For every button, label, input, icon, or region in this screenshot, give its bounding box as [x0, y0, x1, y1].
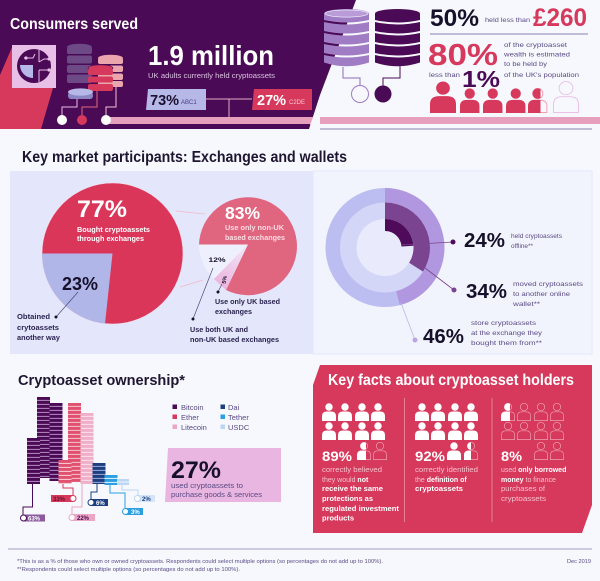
footnotes: **Respondents could select multiple options (so percentages do not add up to 100%).: [17, 567, 241, 573]
column: 8%: used only borrowed: [501, 467, 566, 474]
stat: 80% of wealth: to be held by: [504, 61, 548, 68]
column: 92%: [415, 403, 478, 493]
label: 83%: [225, 203, 285, 242]
stat: 46% at the exchange: 46%: [423, 325, 464, 348]
column: 8%: cryptoassets: [501, 496, 547, 503]
stat: 46% at the exchange: at the exchange they: [471, 330, 543, 337]
stat box: 27% C2DE: [252, 89, 312, 110]
icon: circuit globe: [12, 45, 56, 88]
column: 8%: 8%: [501, 448, 523, 464]
stat: 24% offline: offline**: [511, 243, 533, 250]
stat: 80% of wealth: of the cryptoasset: [504, 42, 567, 49]
column: 89%: [322, 403, 400, 522]
column: 89%: protections as: [322, 496, 373, 503]
stat: 50% held less than 260 pounds: held less than: [485, 18, 530, 24]
stat box: 27% C2DE: C2DE: [289, 100, 305, 106]
column: 92%: the definition of: [415, 477, 467, 484]
legend: coin types: Bitcoin: [181, 403, 204, 412]
stat: 24% offline: 24%: [464, 229, 505, 252]
label: tether 3%: 3%: [131, 510, 140, 516]
column: 92%: cryptoassets: [415, 486, 463, 493]
label: 12%: 12%: [208, 258, 226, 264]
callout: obtained another way: crytoassets: [17, 325, 59, 332]
strip: pink base line: [105, 117, 600, 124]
label: 77%: Bought cryptoassets: [77, 225, 150, 234]
icon: lilac database with node: [324, 9, 369, 102]
stat: 50% held less than 260 pounds: 50%: [430, 5, 479, 32]
column: 92%: correctly identified: [415, 467, 478, 474]
label: dai 6%: 6%: [96, 501, 105, 507]
label: 77%: [77, 196, 150, 243]
label: usdc 2%: 2%: [142, 497, 151, 503]
white triangle accent: [310, 100, 320, 125]
column: 8%: purchases of: [501, 486, 545, 493]
callout: use only UK: exchanges: [215, 309, 252, 316]
stat: 50% held less than 260 pounds: £260: [533, 4, 587, 32]
stat: 80% of wealth: 1%: [462, 66, 500, 92]
stat: 46% at the exchange: [401, 303, 543, 348]
label: ether 33%: 33%: [53, 497, 66, 503]
label: litecoin 22%: 22%: [77, 516, 90, 522]
icons: 8% people: [501, 403, 564, 460]
label: 5%: 5%: [222, 275, 229, 284]
icons: 92% people: [415, 403, 478, 460]
label: 83%: based exchanges: [225, 235, 285, 242]
stat: 50% held less than 260 pounds: [430, 4, 587, 32]
stat: 34% moved: moved cryptoassets: [513, 281, 584, 288]
panel: wallets donut: [313, 171, 592, 354]
callout: 27% goods and services: [165, 448, 281, 502]
stat: 1.9 million: 1.9 million: [148, 40, 274, 71]
stack: dai: [92, 463, 106, 484]
callout: obtained another way: another way: [17, 335, 60, 342]
column: 8%: money to finance: [501, 477, 556, 484]
chart: concentric donut: [326, 188, 444, 307]
callout: 27% goods and services: 27%: [171, 457, 221, 484]
stat: 34% moved: [425, 268, 584, 308]
stat box: 73% ABC1: [146, 89, 206, 110]
label: 83%: Use only non-UK: [225, 225, 284, 232]
stat: 80% of wealth: wealth is estimated: [503, 52, 570, 58]
column: 89%: receive the same: [322, 486, 383, 493]
label: bitcoin 63%: 63%: [28, 516, 41, 522]
legend: coin types: Ether: [181, 413, 199, 422]
stat: 46% at the exchange: bought them from**: [471, 340, 543, 347]
legend: coin types: Dai: [228, 403, 240, 412]
footnotes: *This is as a % of those who own or owned cryptoassets. Respondents could select multiple options (so percentages do not add up to 100%).: [17, 559, 383, 565]
stat: 46% at the exchange: store cryptoassets: [471, 320, 537, 327]
stack: tether: [104, 475, 118, 485]
stacks: ether: [65, 403, 74, 484]
icon: dark database with node: [374, 9, 420, 102]
icon: purple database stack: [67, 44, 92, 83]
callout: use both: Use both UK and: [190, 327, 248, 334]
callout: 27% goods and services: used cryptoassets to: [171, 483, 243, 490]
legend: coin types: Litecoin: [181, 423, 207, 432]
column: 8%: [501, 403, 566, 503]
legend: coin types: Tether: [228, 413, 249, 422]
label: 23%: 23%: [62, 274, 98, 294]
stat: 80% of wealth: [428, 37, 579, 92]
column: 92%: 92%: [415, 448, 446, 464]
panel: exchanges pies: [10, 171, 313, 354]
node circles: [57, 115, 111, 125]
stat: 34% moved: to another online: [513, 291, 570, 298]
icon row: population people: [430, 82, 578, 113]
stat box: 73% ABC1: ABC1: [181, 100, 197, 106]
column: 89%: 89%: [322, 448, 353, 464]
heading: cryptoasset ownership: Cryptoasset ownership*: [18, 373, 185, 389]
heading: key facts: Key facts about cryptoasset holders: [328, 372, 574, 389]
callout: use both: non-UK based exchanges: [190, 337, 279, 344]
connectors from coins to nodes: [62, 87, 116, 120]
callout: 27% goods and services: purchase goods & services: [171, 492, 263, 499]
heading: key market participants: Key market participants: Exchanges and wallets: [22, 149, 347, 166]
label: 77%: through exchanges: [77, 234, 144, 243]
stat: 34% moved: wallet**: [512, 301, 541, 308]
split connector: [206, 99, 252, 117]
label: 77%: 77%: [77, 196, 127, 223]
callout: use only UK: Use only UK based: [215, 299, 280, 306]
icon: red database stack: [88, 65, 113, 91]
stat: 24% offline: [401, 229, 563, 252]
stack: litecoin: [80, 413, 94, 484]
stat box: 27% C2DE: 27%: [257, 93, 286, 109]
stat box: 73% ABC1: 73%: [150, 93, 179, 109]
column: 89%: they would not: [322, 477, 369, 484]
chart: main exchange pie: [17, 183, 205, 342]
callout: obtained another way: [17, 292, 78, 342]
caption: UK adults: UK adults currently held cryptoassets: [148, 73, 276, 80]
stat: 80% of wealth: 80%: [428, 37, 498, 72]
legend: coin types: [172, 403, 250, 432]
column: 89%: products: [322, 516, 354, 522]
label: 83%: 83%: [225, 203, 260, 223]
legend: coin types: USDC: [228, 423, 250, 432]
stat: 80% of wealth: less than: [429, 72, 460, 79]
stacks: bitcoin: [34, 397, 56, 484]
stat: 34% moved: 34%: [466, 280, 507, 303]
icon: pink database stack: [98, 55, 123, 87]
callout: use only UK: [215, 284, 280, 316]
chart: coin stacks: [20, 397, 155, 522]
callout: use both: [190, 268, 279, 344]
panel: consumers served header: [0, 0, 600, 129]
column: 89%: regulated investment: [322, 506, 400, 513]
footnotes: Dec 2019: [567, 559, 591, 565]
chart: exchange type pie: [190, 197, 297, 344]
stat: 80% of wealth: of the UK's population: [504, 72, 579, 79]
stack: usdc: [117, 479, 129, 485]
column: 89%: correctly believed: [322, 467, 382, 474]
heading: consumers served: Consumers served: [10, 16, 138, 33]
stat: 24% offline: held cryptoassets: [511, 233, 563, 240]
panel: key facts: [313, 365, 592, 533]
icon: lilac single coin: [68, 88, 93, 99]
footnotes: [17, 559, 591, 573]
callout: obtained another way: Obtained: [17, 314, 50, 321]
icons: 89% people: [322, 403, 387, 460]
